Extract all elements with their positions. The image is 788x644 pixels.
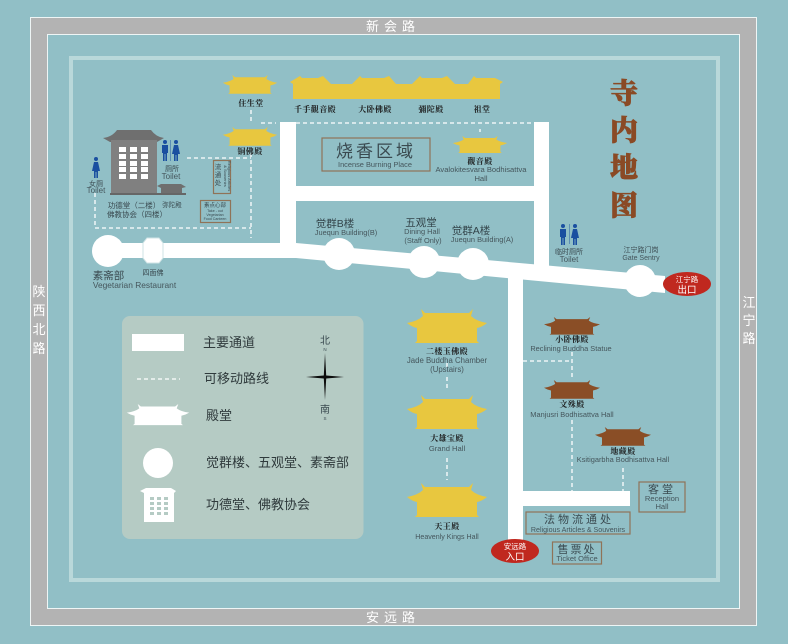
merit hall label: 弥陀殿: [162, 200, 182, 209]
entrance marker: [491, 539, 539, 563]
four-faced Buddha: 四面佛: [142, 268, 164, 277]
exit marker: 江宁路: [676, 274, 699, 284]
hall: Reclining Buddha: 小卧佛殿: [555, 334, 589, 344]
vegetarian restaurant label: 素斋部: [93, 269, 124, 282]
road label: Jiangning Road: 宁: [742, 313, 756, 328]
ticket office box: Ticket Office: [556, 554, 598, 563]
hall: Jade Buddha: [407, 309, 487, 374]
Juequn Building B label: 觉群B楼: [316, 217, 355, 230]
title: 地: [610, 152, 638, 184]
reception hall box: 客堂: [648, 482, 676, 496]
take-out canteen box: Take - out: [207, 209, 223, 213]
ticket office box: [552, 542, 602, 564]
hall: Wangsheng: 住生堂: [238, 98, 264, 108]
religious articles and souvenirs box: 法物流通处: [544, 512, 614, 526]
hall: Ksitigarbha: Ksitigarbha Bodhisattva Hall: [577, 455, 670, 464]
compass: 北: [320, 335, 330, 347]
religious articles box: 通: [215, 170, 222, 179]
exit marker: 出口: [677, 284, 697, 296]
women's toilet label: 女厕: [89, 179, 103, 188]
reception hall box: Hall: [655, 502, 669, 511]
take-out canteen box: [200, 200, 230, 222]
incense burning place: [322, 138, 430, 171]
road label: Shaanxi North Road: 北: [32, 322, 46, 337]
merit hall building: [103, 130, 186, 195]
road label: Shaanxi North Road: [32, 284, 46, 356]
Juequn Building B label: [315, 217, 377, 237]
hall: Bronze Buddha: [223, 127, 277, 156]
road label: Shaanxi North Road: 陕: [32, 284, 46, 299]
road label: Jiangning Road: [742, 295, 756, 346]
legend: merit hall: 功德堂、佛教协会: [206, 497, 310, 512]
icon: temporary toilets: [560, 224, 579, 245]
hall: Avalokitesvara: Hall: [474, 174, 488, 183]
women's toilet label: [87, 179, 106, 195]
hall: Grand Hall: [407, 395, 487, 453]
hall: Jade Buddha: Jade Buddha Chamber: [407, 356, 487, 365]
road label: Shaanxi North Road: 路: [32, 341, 46, 356]
icon: toilets: [162, 140, 180, 161]
Juequn Building B label: Juequn Building(B): [315, 228, 377, 237]
religious articles and souvenirs box: Religious Articles & Souvenirs: [531, 526, 626, 534]
legend panel: [122, 316, 364, 539]
hall row: 千手觀音殿: [294, 104, 336, 114]
hall: Manjusri: 文殊殿: [559, 399, 585, 409]
dining hall label: [404, 217, 442, 245]
gate sentry label: Gate Sentry: [622, 255, 660, 262]
hall: Ksitigarbha: 地藏殿: [610, 446, 636, 456]
hall: Ksitigarbha: [577, 427, 670, 464]
religious articles box: 处: [215, 178, 222, 187]
hall: Reclining Buddha: Reclining Buddha Statue: [530, 344, 612, 353]
compass: N: [323, 347, 327, 352]
vegetarian restaurant label: [93, 269, 177, 290]
hall: Avalokitesvara: [435, 136, 527, 183]
hall row: [290, 76, 503, 114]
legend: walkable route: 可移动路线: [204, 371, 269, 386]
take-out canteen box: 素点心部: [204, 201, 226, 209]
inner wall: [71, 58, 718, 580]
legend: main road: 主要通道: [203, 335, 255, 350]
temporary toilet label: [555, 247, 583, 264]
gate sentry label: [622, 245, 660, 262]
road label: Anyuan Road: 安远路: [366, 610, 420, 625]
merit hall label: 功德堂（二楼）: [108, 200, 160, 210]
Juequn Building A label: Juequn Building(A): [451, 235, 513, 244]
temporary toilet label: Toilet: [560, 255, 579, 264]
Juequn Building A label: [451, 224, 513, 244]
gate sentry label: 江宁路门岗: [624, 245, 658, 254]
hall row: 大卧佛殿: [358, 104, 392, 114]
icon: women's toilet: [92, 157, 100, 178]
merit hall label: [107, 200, 182, 219]
hall: Avalokitesvara: 觀音殿: [467, 156, 493, 166]
hall: Heavenly Kings: Heavenly Kings Hall: [415, 533, 479, 541]
hall: Manjusri: Manjusri Bodhisattva Hall: [530, 410, 614, 419]
temporary toilet label: 临时厕所: [555, 247, 583, 256]
take-out canteen box: Vegetarian: [206, 213, 224, 217]
compass: [306, 335, 344, 421]
compass: S: [323, 416, 327, 421]
four-faced Buddha: [142, 238, 164, 277]
walkable routes: [95, 110, 623, 491]
Juequn Building A label: 觉群A楼: [452, 224, 491, 237]
legend: hall: 殿堂: [206, 408, 232, 423]
religious articles box: [214, 160, 232, 194]
hall: Heavenly Kings: 天王殿: [434, 521, 460, 531]
hall: Grand Hall: 大雄宝殿: [430, 433, 464, 443]
temple grounds: [48, 34, 740, 608]
legend: merit hall: [140, 488, 310, 522]
reception hall box: Reception: [645, 494, 679, 503]
compass: 南: [320, 403, 330, 416]
road label: Jiangning Road: 路: [742, 331, 756, 346]
hall: Grand Hall: Grand Hall: [429, 444, 465, 453]
hall: Wangsheng: [223, 75, 277, 108]
hall: Heavenly Kings: [407, 483, 487, 541]
title: 内: [610, 114, 638, 147]
vegetarian restaurant label: Vegetarian Restaurant: [93, 280, 177, 290]
incense burning place: Incense Burning Place: [338, 160, 412, 169]
hall: Jade Buddha: 二楼玉佛殿: [426, 346, 468, 356]
dining hall label: Dining Hall: [404, 227, 440, 236]
merit hall label: 佛教协会（四楼）: [107, 209, 167, 219]
hall row: 彌陀殿: [418, 104, 444, 114]
legend: buildings: [143, 448, 349, 478]
hall: Reclining Buddha: [530, 317, 612, 353]
dining hall label: 五观堂: [405, 217, 437, 229]
toilet label: Toilet: [162, 172, 181, 181]
religious articles and souvenirs box: [526, 512, 630, 534]
road nodes: [92, 235, 656, 297]
entrance marker: 入口: [505, 552, 525, 563]
entrance marker: 安远路: [504, 541, 527, 551]
legend: hall: [127, 404, 232, 425]
religious articles box: & Souvenirs: [223, 165, 228, 187]
road label: Jiangning Road: 江: [742, 295, 756, 310]
hall row: 祖堂: [474, 104, 490, 114]
hall: Avalokitesvara: Avalokitesvara Bodhisattva: [435, 165, 527, 174]
main roads: [108, 122, 665, 540]
title: 寺: [610, 77, 638, 110]
toilet label: 厕所: [165, 164, 179, 173]
legend: main road: [132, 334, 255, 351]
hall: Bronze Buddha: 铜佛殿: [237, 146, 263, 156]
women's toilet label: Toilet: [87, 186, 106, 195]
religious articles box: Religious Articles: [227, 161, 232, 191]
take-out canteen box: Food Canteen: [204, 217, 226, 221]
dining hall label: (Staff Only): [404, 236, 442, 245]
ticket office box: 售票处: [558, 542, 596, 556]
incense burning place: 烧香区域: [336, 142, 416, 161]
reception hall box: [639, 482, 685, 512]
road label: Shaanxi North Road: 西: [32, 303, 46, 318]
road label: Xinhui Road: 新会路: [366, 19, 420, 34]
exit marker: [663, 272, 711, 296]
hall: Manjusri: [530, 380, 614, 419]
title: 图: [610, 190, 638, 222]
legend: walkable route: [137, 371, 269, 386]
legend: buildings: 觉群楼、五观堂、素斋部: [206, 455, 349, 470]
hall: Jade Buddha: (Upstairs): [430, 365, 464, 374]
toilet label: [162, 164, 181, 181]
religious articles box: 流: [215, 162, 222, 171]
title: [610, 77, 638, 222]
